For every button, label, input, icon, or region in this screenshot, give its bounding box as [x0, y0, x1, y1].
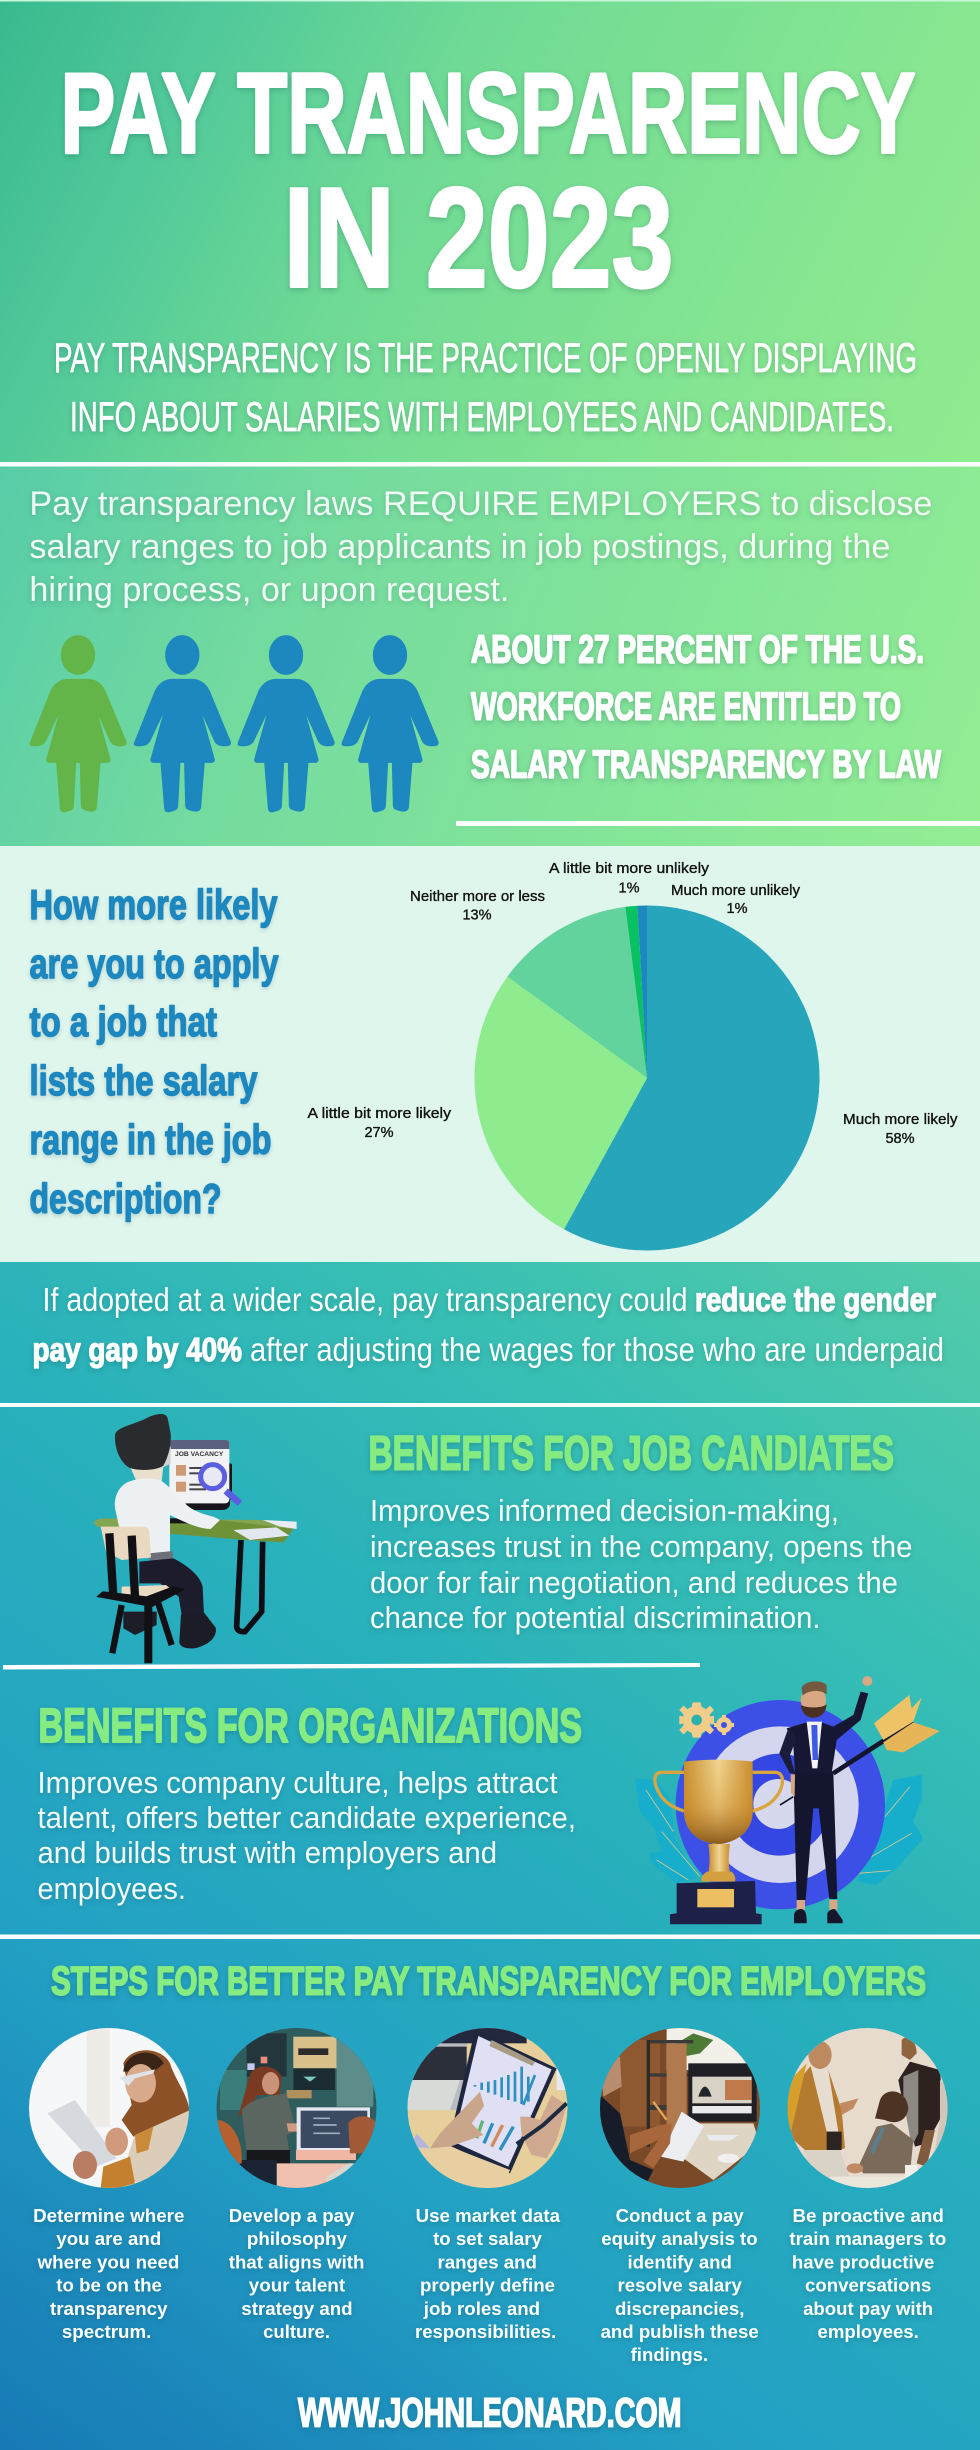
pie label: much more unlikely — [671, 883, 801, 917]
step 5 text: about pay with — [803, 2298, 933, 2319]
survey question: to a job that — [30, 998, 217, 1045]
step 4 text — [601, 2205, 759, 2365]
step 1 text: to be on the — [56, 2275, 162, 2296]
pie label: much more unlikely: Much more unlikely — [671, 883, 801, 899]
pie label: neither more or less: 13% — [462, 908, 492, 924]
pie label: much more likely: 58% — [885, 1131, 915, 1147]
text block: candidate benefits: increases trust in the company, opens the — [370, 1529, 912, 1564]
icon: blue woman figure 2 — [238, 636, 334, 812]
illustration: trophy, target and businessman — [635, 1676, 940, 1924]
step 5 text: Be proactive and — [792, 2205, 944, 2226]
step 5 text — [789, 2205, 946, 2342]
step 3 text: ranges and — [438, 2251, 537, 2272]
pie label: neither more or less — [410, 889, 545, 924]
callout: gender pay gap: If adopted at a wider scale, pay transparency could — [42, 1281, 688, 1318]
step 2 text: your talent — [249, 2275, 345, 2296]
step 4 text: discrepancies, — [615, 2298, 744, 2319]
pie label: much more likely — [843, 1112, 958, 1147]
website footer: WWW.JOHNLEONARD.COM — [298, 2390, 682, 2436]
step 2 text: philosophy — [247, 2228, 348, 2249]
pie label: much more unlikely: 1% — [727, 901, 748, 917]
step 3 text: Use market data — [416, 2205, 561, 2226]
survey question: range in the job — [30, 1116, 272, 1163]
step 3 text: properly define — [420, 2275, 555, 2296]
photo: hands over chart clipboard — [408, 2028, 568, 2188]
step 4 text: equity analysis to — [601, 2228, 758, 2249]
step 4 text: resolve salary — [618, 2275, 743, 2296]
text block: candidate benefits: chance for potential discrimination. — [370, 1600, 820, 1635]
pie label: a little bit more likely — [308, 1106, 452, 1141]
text block: organization benefits: and builds trust with employers and — [38, 1835, 497, 1870]
survey question: How more likely — [30, 881, 278, 928]
text block: organization benefits — [38, 1765, 576, 1906]
illustration: job seeker at desk — [93, 1414, 297, 1663]
photo: woman with tablet — [29, 2028, 189, 2188]
step 5 text: have productive — [792, 2251, 934, 2272]
step 5 text: employees. — [818, 2321, 919, 2342]
laws paragraph: salary ranges to job applicants in job postings, during the — [29, 528, 890, 566]
survey question: description? — [30, 1175, 222, 1222]
step 1 text: spectrum. — [62, 2321, 151, 2342]
step 2 text: that aligns with — [229, 2251, 364, 2272]
text block: organization benefits: employees. — [38, 1871, 186, 1906]
pie label: a little bit more unlikely: 1% — [619, 880, 640, 896]
title: IN 2023 — [284, 158, 674, 318]
survey question — [30, 881, 279, 1222]
title — [60, 50, 916, 318]
laws paragraph: Pay transparency laws REQUIRE EMPLOYERS to disclose — [29, 485, 932, 523]
illustration: job seeker at desk: JOB VACANCY — [175, 1451, 224, 1458]
panel: title header — [0, 0, 980, 464]
pie label: a little bit more likely: A little bit more likely — [308, 1106, 452, 1122]
pie label: a little bit more unlikely: A little bit more unlikely — [549, 861, 710, 877]
icon: green woman figure — [30, 636, 126, 812]
text block: candidate benefits: Improves informed decision-making, — [370, 1493, 839, 1528]
step 3 text: to set salary — [433, 2228, 543, 2249]
step 2 text: strategy and — [241, 2298, 353, 2319]
step 3 text: responsibilities. — [415, 2321, 556, 2342]
photo: woman presenting code on monitor — [213, 2027, 380, 2190]
pie label: a little bit more likely: 27% — [364, 1125, 394, 1141]
pie label: neither more or less: Neither more or less — [410, 889, 545, 905]
text block: candidate benefits: door for fair negotiation, and reduces the — [370, 1565, 898, 1600]
photo: three colleagues talking — [783, 2027, 953, 2190]
step 3 text: job roles and — [423, 2298, 540, 2319]
workforce statistic — [471, 628, 941, 786]
step 4 text: and publish these — [601, 2321, 759, 2342]
step 2 text — [229, 2205, 364, 2342]
icon: blue woman figure 1 — [134, 636, 230, 812]
step 1 text: Determine where — [33, 2205, 184, 2226]
step 1 text: you are and — [56, 2228, 161, 2249]
step 4 text: Conduct a pay — [616, 2205, 744, 2226]
pie label: a little bit more unlikely — [549, 861, 710, 896]
heading: benefits for organizations: BENEFITS FOR ORGANIZATIONS — [38, 1700, 582, 1753]
text block: organization benefits: talent, offers better candidate experience, — [38, 1800, 576, 1835]
step 4 text: findings. — [631, 2344, 708, 2365]
text block: candidate benefits — [370, 1493, 912, 1635]
text block: organization benefits: Improves company culture, helps attract — [38, 1765, 558, 1800]
callout: gender pay gap: pay gap by 40% — [32, 1331, 242, 1368]
step 3 text — [415, 2205, 561, 2342]
callout: gender pay gap: reduce the gender — [695, 1281, 936, 1318]
laws paragraph: hiring process, or upon request. — [29, 571, 509, 609]
step 4 text: identify and — [628, 2251, 732, 2272]
survey question: lists the salary — [30, 1057, 258, 1104]
step 2 text: Develop a pay — [229, 2205, 355, 2226]
step 1 text: transparency — [50, 2298, 168, 2319]
step 2 text: culture. — [263, 2321, 330, 2342]
photo: video meeting at desk — [597, 2027, 763, 2190]
step 1 text: where you need — [36, 2251, 179, 2272]
step 5 text: train managers to — [789, 2228, 946, 2249]
survey question: are you to apply — [30, 940, 279, 987]
icon: blue woman figure 3 — [342, 636, 438, 812]
laws paragraph — [29, 485, 932, 609]
panel: laws and workforce statistic — [0, 466, 980, 846]
pie chart — [474, 906, 820, 1250]
callout: gender pay gap — [32, 1281, 944, 1368]
step 5 text: conversations — [805, 2275, 931, 2296]
panel: survey pie chart — [0, 846, 980, 1262]
pie label: much more likely: Much more likely — [843, 1112, 958, 1128]
step 1 text — [33, 2205, 184, 2342]
subtitle — [54, 334, 917, 440]
